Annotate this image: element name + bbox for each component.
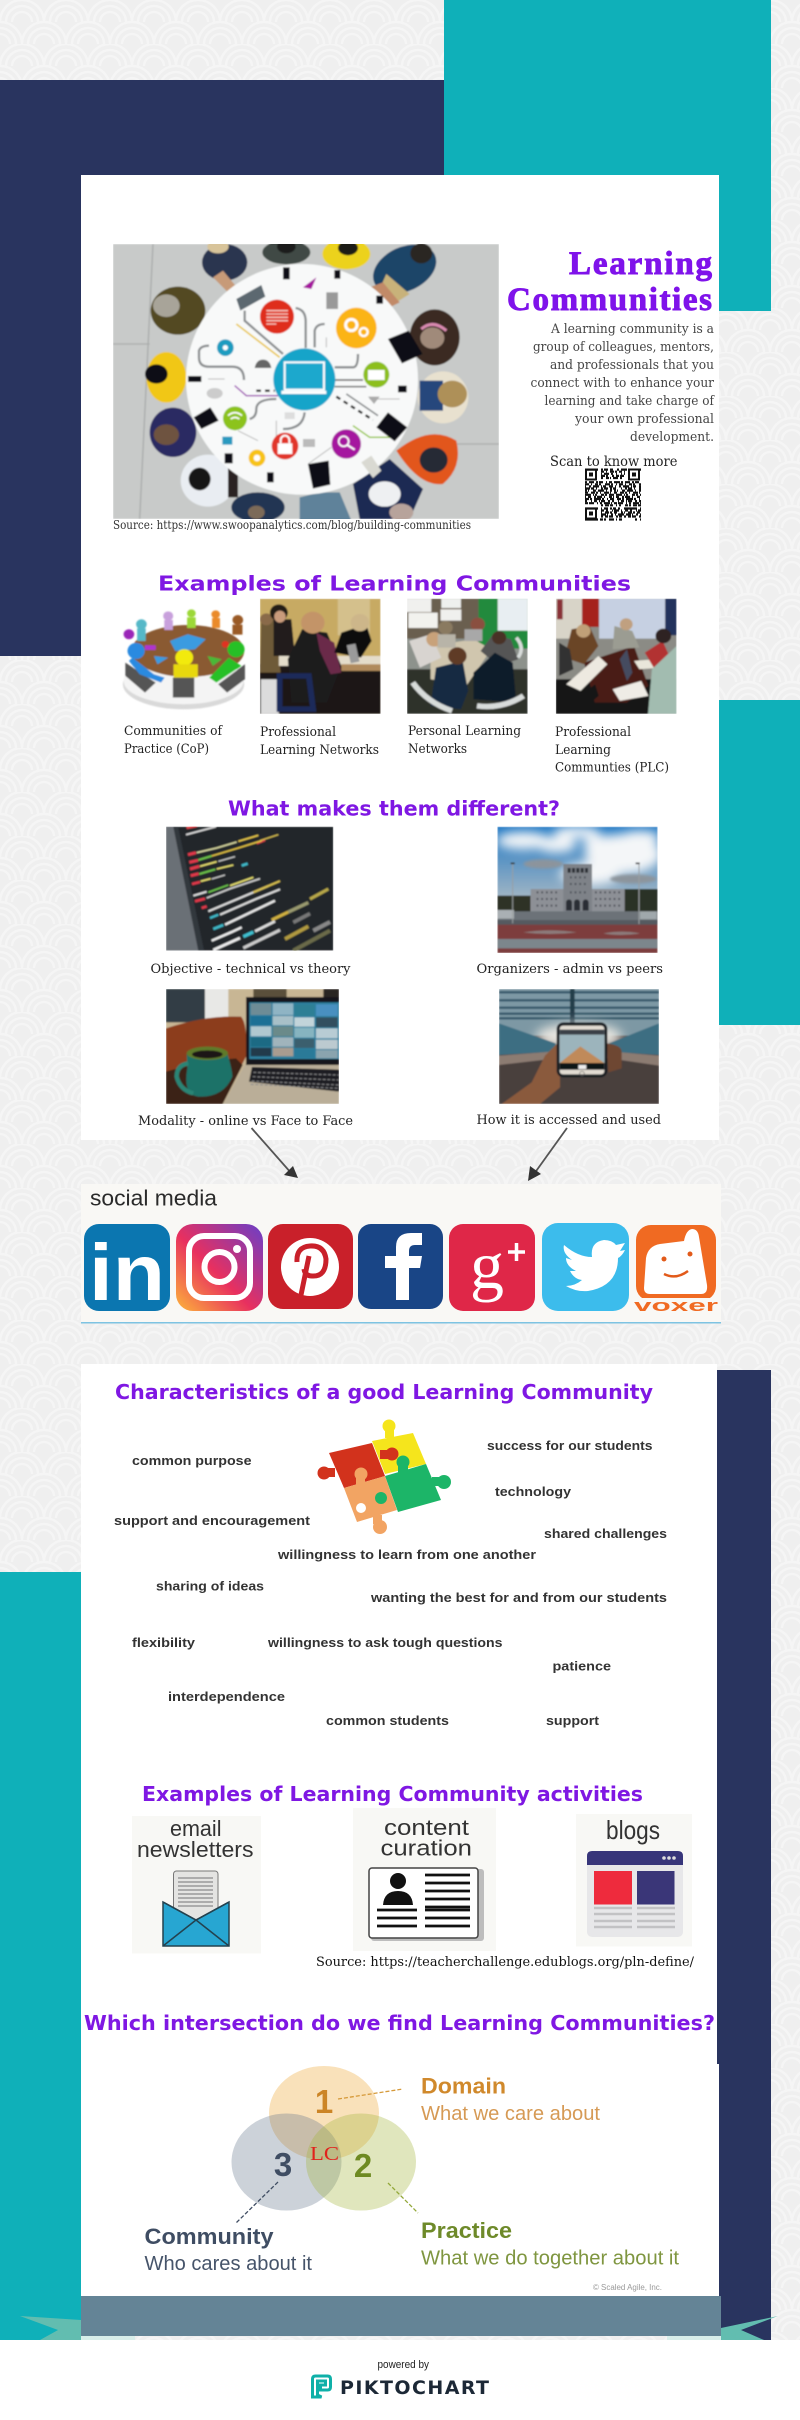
image: code on a screen [166, 826, 333, 951]
word cloud: characteristics: patience [552, 1658, 611, 1674]
icon: email newsletters: email [170, 1816, 222, 1841]
footer ribbon tails [20, 2316, 778, 2340]
venn numbers [274, 2083, 372, 2184]
word cloud: characteristics: wanting the best for and from our students [370, 1590, 667, 1605]
captions: objective and organizers: Objective - technical vs theory [150, 962, 351, 977]
icon: Instagram [176, 1224, 263, 1311]
word cloud: characteristics: interdependence [168, 1689, 285, 1704]
venn circles [232, 2066, 416, 2210]
title [507, 246, 712, 318]
people [145, 235, 468, 522]
venn leader lines [236, 2089, 418, 2223]
venn diagram [144, 2066, 679, 2292]
word cloud: characteristics: technology [495, 1484, 572, 1499]
panel: powered by footer [0, 2340, 800, 2420]
heading: examples of learning communities: Examples of Learning Communities [158, 572, 631, 596]
word cloud: characteristics: support [546, 1713, 600, 1728]
icon: Voxer: voxer [634, 1296, 719, 1315]
intro text: your own professional [574, 412, 714, 427]
image: building under blue sky [497, 826, 662, 953]
image: professional learning communities meeting [556, 599, 677, 714]
panel: teal top block [444, 0, 771, 311]
word cloud: characteristics: support and encouragement [114, 1513, 311, 1528]
LC label: LC [310, 2143, 339, 2165]
icon: QR code [585, 470, 641, 520]
panel: white upper card [81, 175, 719, 1140]
captions: community examples: Learning Networks [260, 743, 379, 758]
icon: content curation [353, 1808, 496, 1951]
Piktochart wordmark: PIKTOCHART [340, 2377, 489, 2399]
panel: navy lower-right block [717, 1370, 771, 2340]
word cloud: characteristics: common students [326, 1713, 449, 1728]
panel: white lower card [81, 1364, 719, 2300]
captions: objective and organizers: Organizers - admin vs peers [476, 962, 663, 977]
panel: navy top block [0, 80, 444, 656]
word cloud: characteristics: sharing of ideas [156, 1578, 264, 1594]
icon: blogs [576, 1814, 692, 1946]
copyright: © Scaled Agile, Inc. [593, 2283, 662, 2292]
word cloud: characteristics: willingness to ask tough questions [267, 1635, 502, 1650]
captions: community examples: Communities of [124, 724, 223, 739]
domain label: What we care about [421, 2103, 600, 2125]
image: personal learning networks group [407, 599, 528, 714]
image: clip-art round table [123, 609, 245, 709]
scan prompt: Scan to know more [550, 454, 678, 470]
domain label: Domain [421, 2074, 506, 2098]
word cloud: characteristics: common purpose [132, 1453, 252, 1468]
captions: community examples: Practice (CoP) [124, 742, 209, 757]
table [186, 264, 418, 495]
community label [144, 2224, 312, 2275]
icon: blogs: blogs [606, 1815, 660, 1845]
icon: Facebook [358, 1224, 443, 1309]
panel: teal lower-left block [0, 1572, 81, 2340]
icon: Twitter [542, 1223, 629, 1311]
venn numbers: 3 [274, 2146, 292, 2183]
heading: which intersection: Which intersection do we find Learning Communities? [84, 2011, 715, 2035]
icon: LinkedIn: in [89, 1228, 165, 1317]
intro text: and professionals that you [550, 358, 714, 373]
hero photo: people round a table [113, 235, 499, 522]
captions: modality and access: How it is accessed and used [476, 1113, 661, 1128]
captions: modality and access: Modality - online vs Face to Face [138, 1114, 353, 1129]
intro text: connect with to enhance your [530, 376, 715, 391]
captions: community examples: Learning [555, 743, 611, 758]
heading: activities: Examples of Learning Community activities [142, 1782, 643, 1806]
tablets and devices [188, 267, 423, 489]
icon: Google Plus: g [470, 1227, 504, 1303]
icon: email newsletters [132, 1816, 261, 1954]
app icons [273, 348, 335, 410]
practice label [421, 2218, 679, 2270]
heading: what makes them different: What makes them different? [228, 796, 560, 820]
intro text [530, 322, 715, 445]
powered by: powered by [378, 2359, 429, 2371]
icon: Pinterest [268, 1224, 353, 1309]
icon: content curation: curation [380, 1836, 472, 1860]
title: Communities [507, 282, 712, 318]
icon: content curation: content [384, 1815, 469, 1840]
intro text: A learning community is a [550, 322, 714, 337]
icon: email newsletters: newsletters [137, 1837, 254, 1862]
arrow: modality to social media [252, 1128, 298, 1178]
word cloud: characteristics: success for our students [487, 1438, 652, 1453]
heading: characteristics: Characteristics of a good Learning Community [115, 1380, 653, 1404]
community label: Community [144, 2224, 274, 2249]
intro text: development. [630, 430, 714, 445]
word cloud: characteristics: willingness to learn from one another [277, 1547, 536, 1562]
panel: social media [81, 1184, 721, 1324]
captions: community examples [124, 724, 669, 776]
captions: community examples: Professional [260, 725, 336, 740]
icon: Google Plus [449, 1224, 535, 1311]
image: hand holding phone in corridor [499, 989, 659, 1104]
venn numbers: 1 [315, 2083, 333, 2120]
practice label: Practice [421, 2218, 512, 2243]
captions: community examples: Communties (PLC) [555, 760, 669, 776]
photo row: community examples [123, 599, 677, 714]
captions: community examples: Networks [408, 742, 467, 757]
icon: Piktochart logo [312, 2376, 330, 2397]
social media label: social media [90, 1186, 218, 1210]
circuit lines [199, 308, 378, 429]
intro text: group of colleagues, mentors, [533, 340, 714, 355]
intro text: learning and take charge of [544, 394, 715, 409]
venn numbers: 2 [354, 2147, 372, 2184]
icon: Voxer [634, 1225, 719, 1315]
footer slate bar [81, 2296, 721, 2336]
captions: objective and organizers [150, 962, 663, 977]
word cloud: characteristics [114, 1438, 667, 1728]
hero source: Source: https://www.swoopanalytics.com/blog/building-communities [113, 518, 471, 532]
captions: modality and access [138, 1113, 661, 1129]
panel: teal right block [719, 700, 800, 1025]
title: Learning [569, 246, 712, 282]
word cloud: characteristics: shared challenges [544, 1526, 667, 1541]
image: video call on laptop with mug [166, 989, 339, 1104]
captions: community examples: Professional [555, 725, 631, 740]
word cloud: characteristics: flexibility [132, 1635, 196, 1650]
activities source: Source: https://teacherchallenge.edublogs.org/pln-define/ [316, 1955, 695, 1970]
arrow: access to social media [528, 1128, 567, 1181]
practice label: What we do together about it [421, 2248, 679, 2270]
community label: Who cares about it [144, 2253, 312, 2275]
domain label [421, 2074, 600, 2125]
image: professional learning networks meeting [260, 599, 381, 714]
icon: puzzle pieces [318, 1420, 451, 1534]
captions: community examples: Personal Learning [408, 724, 521, 739]
